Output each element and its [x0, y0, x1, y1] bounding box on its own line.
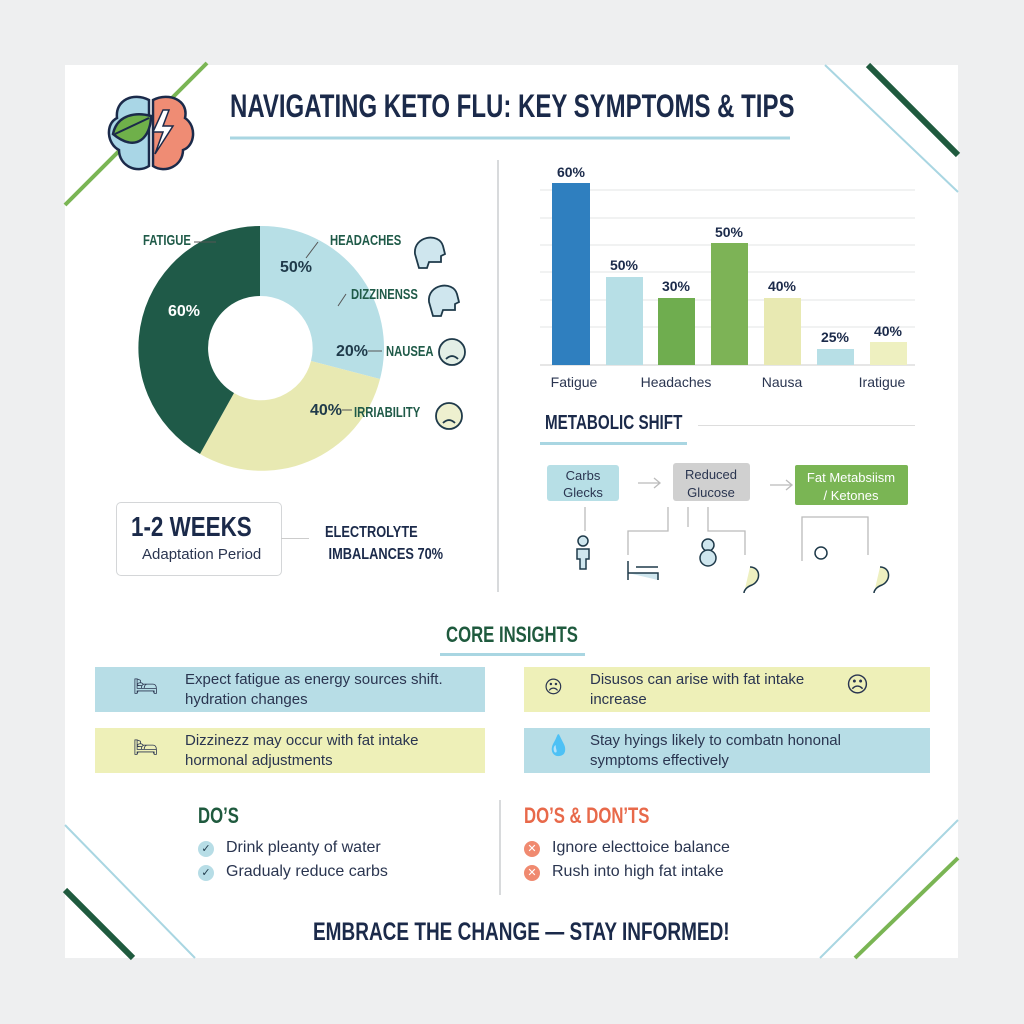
icon: brain with leaf — [108, 96, 194, 170]
callout: adaptation period: 1-2 WEEKS — [131, 511, 252, 542]
donts list — [524, 803, 730, 881]
insight: hydration: symptoms effectively — [590, 752, 729, 769]
callout: adaptation period — [116, 502, 282, 576]
flow diagram: Fat Metabsiism — [807, 470, 895, 485]
donts list: ✕ — [527, 867, 537, 879]
donut chart: 20% — [336, 343, 368, 360]
heading: metabolic shift: METABOLIC SHIFT — [545, 412, 682, 434]
bar chart: 60% — [557, 164, 586, 180]
heading: metabolic shift — [540, 412, 915, 445]
dos list: Gradualy reduce carbs — [226, 863, 388, 880]
insight: fatigue: Expect fatigue as energy sources shift. — [185, 671, 443, 688]
flow diagram — [547, 463, 908, 593]
insight: discuss — [524, 667, 930, 712]
insight: discuss: ☹ — [544, 677, 563, 697]
bar chart: 40% — [768, 278, 797, 294]
donut labels: IRRIABILITY — [354, 404, 420, 421]
electrolyte stat — [325, 524, 443, 563]
footer tagline: EMBRACE THE CHANGE — STAY INFORMED! — [313, 918, 730, 946]
bar chart: 25% — [821, 329, 850, 345]
dos list: Drink pleanty of water — [226, 839, 381, 856]
donts list: ✕ — [527, 843, 537, 855]
flow diagram: Reduced — [685, 467, 737, 482]
bar chart: 40% — [874, 323, 903, 339]
flow diagram: Carbs — [566, 468, 601, 483]
donts list: Ignore electtoice balance — [552, 839, 730, 856]
donut chart: 60% — [168, 303, 200, 320]
insight: dizziness: Dizzinezz may occur with fat intake — [185, 732, 418, 749]
donut chart — [138, 226, 384, 471]
insight: dizziness: 🛏 — [133, 737, 158, 759]
insight: dizziness: hormonal adjustments — [185, 752, 333, 769]
insight: fatigue: 🛏 — [133, 676, 158, 698]
insight: fatigue — [95, 667, 485, 712]
callout: adaptation period: Adaptation Period — [142, 546, 261, 563]
donut labels — [143, 232, 434, 421]
donut labels: DIZZINENSS — [351, 286, 418, 303]
donut chart: 40% — [310, 402, 342, 419]
heading: core insights: CORE INSIGHTS — [446, 622, 578, 647]
symptom icons — [414, 236, 466, 430]
flow diagram: / Ketones — [824, 488, 879, 503]
dos list: DO’S — [198, 803, 239, 828]
electrolyte stat: ELECTROLYTE — [325, 524, 418, 541]
insight: discuss: ☹ — [846, 672, 869, 697]
flow diagram: Glecks — [563, 485, 603, 500]
bar chart: 30% — [662, 278, 691, 294]
dos list: ✓ — [201, 867, 211, 879]
bar chart: Headaches — [641, 374, 711, 390]
dos list: ✓ — [201, 843, 211, 855]
bar chart: Nausa — [762, 374, 802, 390]
bar chart: 50% — [610, 257, 639, 273]
donut chart: 50% — [280, 259, 312, 276]
bar chart — [540, 164, 915, 390]
electrolyte stat: IMBALANCES 70% — [329, 546, 443, 563]
insight: hydration — [524, 728, 930, 773]
title: NAVIGATING KETO FLU: KEY SYMPTOMS & TIPS — [230, 88, 794, 124]
flow diagram: Glucose — [687, 485, 735, 500]
insight: fatigue: hydration changes — [185, 691, 308, 708]
insight: hydration: 💧 — [546, 735, 571, 757]
bar chart: 50% — [715, 224, 744, 240]
insight: discuss: increase — [590, 691, 647, 708]
donts list: DO’S & DON’TS — [524, 803, 649, 828]
heading: core insights — [440, 622, 585, 656]
donut labels: NAUSEA — [386, 343, 434, 360]
donut labels: FATIGUE — [143, 232, 191, 249]
insight: dizziness — [95, 728, 485, 773]
donut labels: HEADACHES — [330, 232, 401, 249]
insight boxes — [95, 667, 930, 773]
insight: hydration: Stay hyings likely to combatn hononal — [590, 732, 841, 749]
bar chart: Iratigue — [859, 374, 906, 390]
dos list — [198, 803, 388, 881]
insight: discuss: Disusos can arise with fat intake — [590, 671, 804, 688]
donts list: Rush into high fat intake — [552, 863, 724, 880]
bar chart: Fatigue — [551, 374, 598, 390]
